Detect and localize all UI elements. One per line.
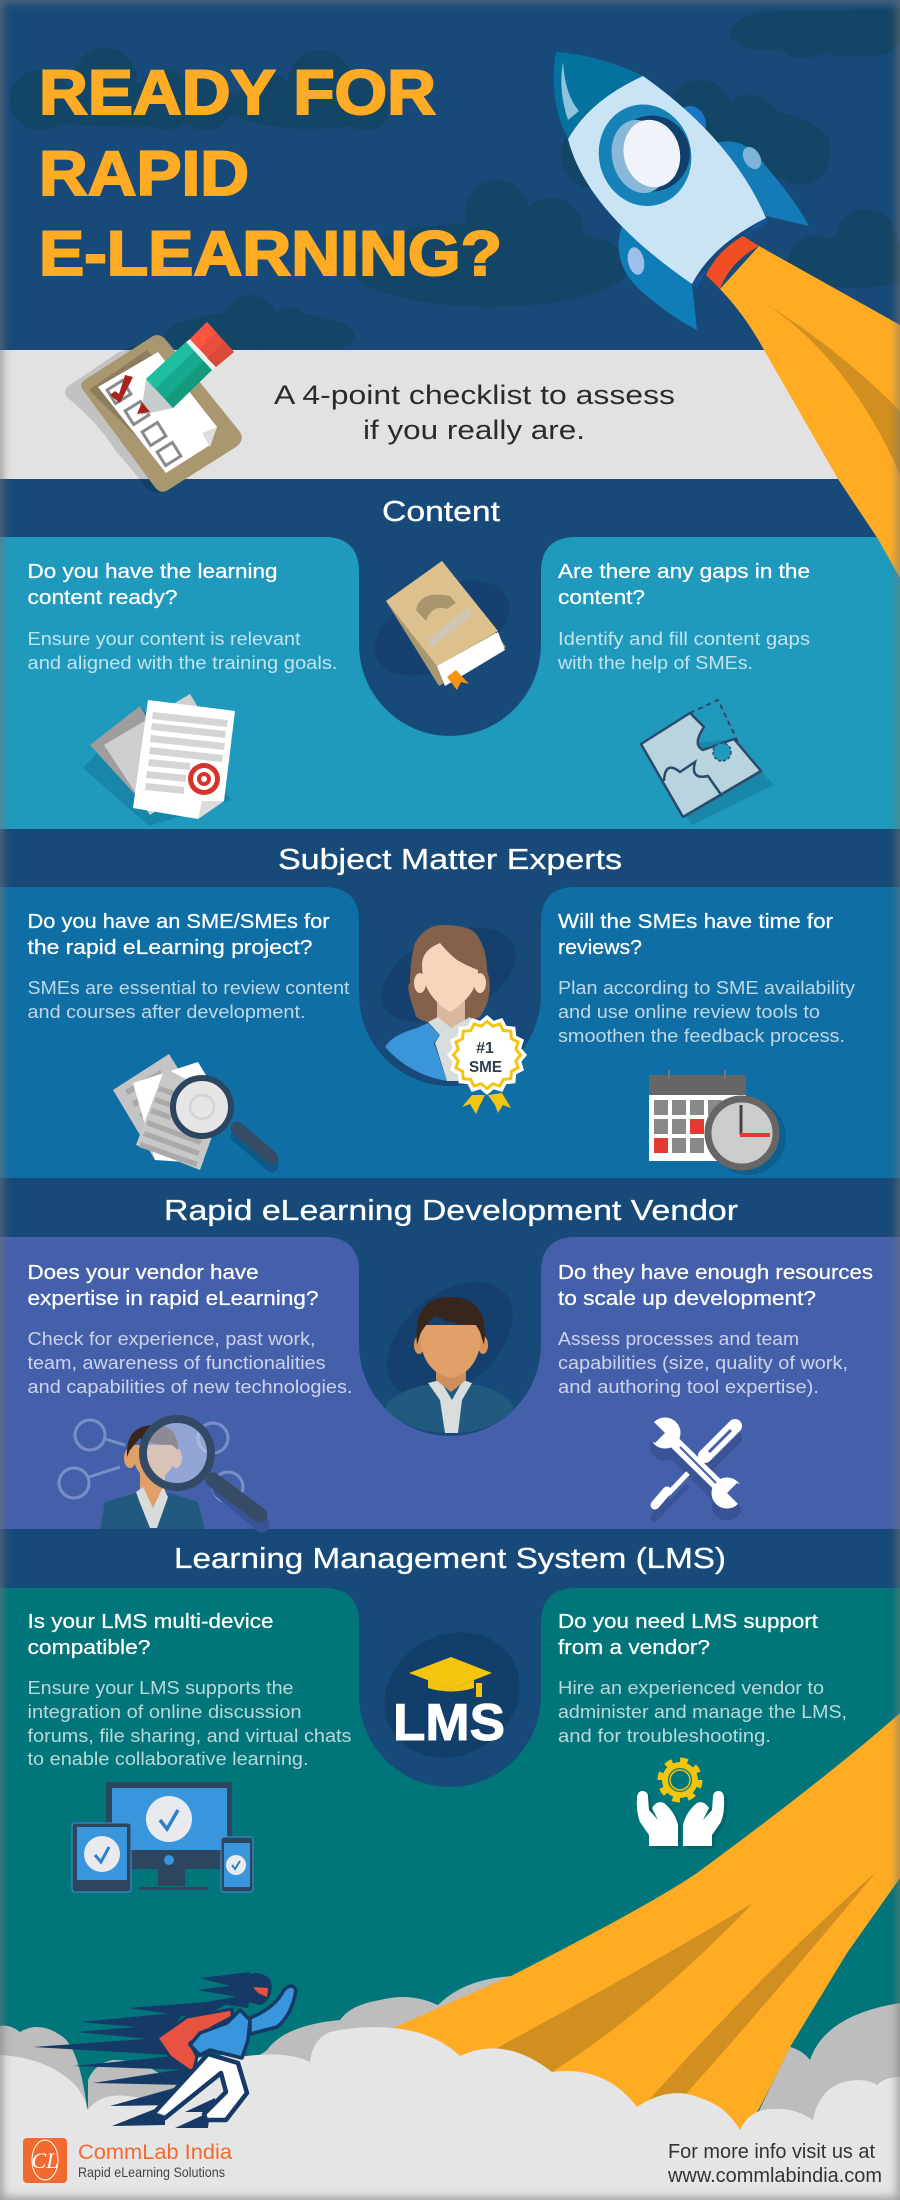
section: Subject Matter Experts: SMEs are essential to review content	[28, 978, 350, 998]
section: Content: Identify and fill content gaps	[558, 629, 810, 649]
section: Learning Management System: integration of online discussion	[28, 1702, 302, 1722]
rocket	[554, 52, 809, 330]
section: Subject Matter Experts: the rapid eLearning project?	[28, 937, 312, 959]
section: Content: Ensure your content is relevant	[28, 629, 300, 649]
icon: gear and hands	[637, 1760, 727, 1849]
icon: SME badge	[447, 1015, 527, 1114]
section: Content: and aligned with the training goals.	[28, 653, 338, 673]
icon: calendar and clock	[649, 1070, 786, 1175]
section: Content: Content	[382, 496, 500, 528]
section: Subject Matter Experts: and use online review tools to	[558, 1002, 820, 1022]
logo	[23, 2138, 232, 2183]
title	[39, 58, 502, 289]
icon: wrench and screwdriver	[644, 1418, 748, 1520]
section: Rapid eLearning Development Vendor: and capabilities of new technologies.	[28, 1377, 352, 1397]
section: Rapid eLearning Development Vendor: expertise in rapid eLearning?	[28, 1288, 318, 1310]
section: Learning Management System: from a vendor?	[558, 1637, 710, 1659]
section: Content: with the help of SMEs.	[557, 653, 753, 673]
footer contact: www.commlabindia.com	[667, 2165, 882, 2187]
footer contact: For more info visit us at	[668, 2141, 875, 2163]
title: RAPID	[39, 139, 249, 209]
section: Subject Matter Experts	[0, 844, 900, 1178]
section: Learning Management System: Hire an experienced vendor to	[558, 1678, 824, 1698]
icon: SME badge: SME	[469, 1059, 502, 1076]
icon: book	[360, 561, 524, 695]
logo: CL	[32, 2148, 58, 2173]
icon: vendor search	[59, 1419, 262, 1529]
section: Learning Management System: Is your LMS multi-device	[28, 1611, 274, 1633]
icon: LMS cap and label	[361, 1608, 543, 1782]
section: Content	[0, 496, 900, 829]
back clouds	[0, 1976, 900, 2150]
section: Learning Management System: Ensure your LMS supports the	[28, 1678, 294, 1698]
icon: puzzle	[641, 700, 774, 825]
section: Learning Management System: Do you need LMS support	[558, 1611, 818, 1633]
section: Learning Management System: and for troubleshooting.	[558, 1726, 771, 1746]
icon: documents with target	[83, 694, 235, 826]
section: Rapid eLearning Development Vendor: Do they have enough resources	[558, 1262, 873, 1284]
section: Learning Management System: Learning Management System (LMS)	[174, 1543, 726, 1575]
section: Learning Management System: administer and manage the LMS,	[558, 1702, 847, 1722]
icon: female SME	[367, 908, 531, 1081]
runner superhero	[33, 1972, 296, 2128]
icon: male vendor	[365, 1258, 535, 1433]
section: Subject Matter Experts: Plan according to SME availability	[558, 978, 855, 998]
icon: clipboard and pencil	[65, 322, 242, 493]
section: Rapid eLearning Development Vendor	[0, 1195, 900, 1529]
section: Rapid eLearning Development Vendor: Assess processes and team	[558, 1329, 799, 1349]
section: Subject Matter Experts: reviews?	[558, 937, 642, 959]
section: Content: Do you have the learning	[28, 561, 278, 583]
section: Rapid eLearning Development Vendor: Check for experience, past work,	[28, 1329, 316, 1349]
section: Subject Matter Experts: Will the SMEs have time for	[558, 911, 833, 933]
icon: SME badge: #1	[476, 1040, 494, 1057]
front clouds	[0, 2027, 900, 2200]
section: Learning Management System: to enable collaborative learning.	[28, 1749, 308, 1769]
section: Subject Matter Experts: and courses after development.	[28, 1002, 306, 1022]
section: Rapid eLearning Development Vendor: Does your vendor have	[28, 1262, 258, 1284]
section: Rapid eLearning Development Vendor: Rapid eLearning Development Vendor	[164, 1195, 738, 1227]
section: Learning Management System: compatible?	[28, 1637, 150, 1659]
section: Rapid eLearning Development Vendor: team, awareness of functionalities	[28, 1353, 326, 1373]
subtitle band	[0, 350, 900, 479]
title: E-LEARNING?	[39, 219, 502, 289]
section: Content: content ready?	[28, 587, 178, 609]
subtitle band: A 4-point checklist to assess	[274, 380, 675, 410]
section: Subject Matter Experts: smoothen the feedback process.	[558, 1026, 845, 1046]
big flame bottom	[393, 1713, 900, 2140]
section: Rapid eLearning Development Vendor: capabilities (size, quality of work,	[558, 1353, 848, 1373]
background clouds	[10, 8, 900, 359]
subtitle band: if you really are.	[363, 415, 585, 445]
section: Content: content?	[558, 587, 645, 609]
section: Learning Management System: forums, file sharing, and virtual chats	[28, 1726, 352, 1746]
logo: Rapid eLearning Solutions	[78, 2164, 225, 2180]
icon: documents with magnifier	[113, 1054, 272, 1170]
title: READY FOR	[39, 58, 436, 128]
rocket flame top	[720, 246, 900, 578]
footer contact	[667, 2141, 882, 2187]
section: Subject Matter Experts: Subject Matter Experts	[278, 844, 622, 876]
section: Rapid eLearning Development Vendor: to scale up development?	[558, 1288, 816, 1310]
section: Content: Are there any gaps in the	[558, 561, 810, 583]
section: Rapid eLearning Development Vendor: and authoring tool expertise).	[558, 1377, 819, 1397]
section: Learning Management System	[0, 1543, 900, 2200]
icon: LMS cap and label: LMS	[393, 1694, 505, 1752]
logo: CommLab India	[78, 2141, 232, 2164]
section: Subject Matter Experts: Do you have an SME/SMEs for	[28, 911, 330, 933]
icon: devices	[72, 1782, 253, 1892]
